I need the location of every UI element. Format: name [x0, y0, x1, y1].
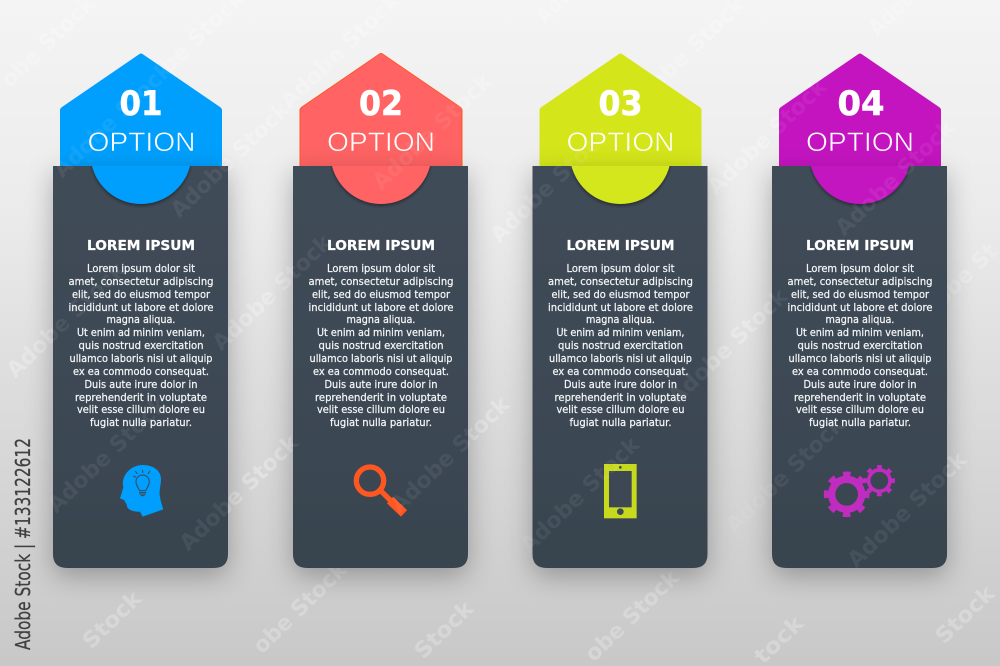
- body text: quis nostrud exercitation: [798, 340, 922, 352]
- body text: ex ea commodo consequat.: [552, 366, 688, 378]
- body text: incididunt ut labore et dolore: [548, 302, 693, 314]
- body text: [548, 263, 693, 429]
- body text: ex ea commodo consequat.: [792, 366, 928, 378]
- icon: gears: [827, 467, 893, 514]
- watermarks on background: Stock: [410, 595, 480, 664]
- tab: lime pentagon: [540, 54, 702, 170]
- body text: Duis aute irure dolor in: [564, 379, 677, 391]
- option label: OPTION: [566, 127, 674, 157]
- tab: coral pentagon: [300, 54, 462, 170]
- side credit text: Adobe Stock | #133122612: [11, 438, 35, 650]
- body text: Ut enim ad minim veniam,: [317, 327, 445, 339]
- watermarks over panels: [2, 57, 973, 573]
- body text: ullamco laboris nisi ut aliquip: [70, 353, 213, 365]
- body text: incididunt ut labore et dolore: [68, 302, 214, 314]
- option label: OPTION: [88, 127, 196, 157]
- watermarks over panels: Adobe Stock: [843, 447, 973, 573]
- tab: purple pentagon: [779, 54, 941, 170]
- watermarks on background: Adobe Stock: [386, 392, 516, 518]
- watermarks over panels: Adobe Stock: [703, 74, 833, 200]
- watermarks on background: Stock: [78, 585, 148, 654]
- panel: option 01: [53, 54, 228, 568]
- body text: incididunt ut labore et dolore: [308, 302, 454, 314]
- body text: elit, sed do eiusmod tempor: [312, 289, 451, 301]
- watermarks over panels: Adobe Stock: [831, 115, 961, 241]
- body text: Ut enim ad minim veniam,: [796, 327, 924, 339]
- body text: Lorem ipsum dolor sit: [327, 263, 435, 275]
- watermarks on background: Stock: [931, 580, 1000, 649]
- watermarks over panels: Adobe Stock: [49, 57, 179, 183]
- body text: magna aliqua.: [586, 314, 655, 326]
- number: 03: [598, 84, 642, 124]
- watermarks on background: Adobe Stock: [831, 115, 961, 241]
- watermarks on background: Adobe Stock: [208, 230, 338, 356]
- tab: circular overlap: [92, 160, 190, 204]
- body text: Duis aute irure dolor in: [324, 379, 438, 391]
- watermarks over panels: Adobe Stock: [166, 97, 296, 223]
- watermarks over panels: Adobe Stock: [175, 430, 305, 556]
- icon: smartphone: [604, 464, 637, 518]
- heading: LOREM IPSUM: [87, 238, 195, 254]
- tab: blue pentagon: [60, 54, 222, 170]
- body text: reprehenderit in voluptate: [315, 392, 447, 404]
- card body: [772, 166, 947, 568]
- number: 01: [120, 84, 162, 124]
- icon: magnifying glass: [356, 467, 404, 513]
- card body: [293, 166, 468, 568]
- body text: fugiat nulla pariatur.: [330, 417, 432, 429]
- body text: quis nostrud exercitation: [78, 340, 204, 352]
- tab: circular overlap: [332, 160, 430, 204]
- body text: elit, sed do eiusmod tempor: [552, 289, 690, 301]
- body text: Duis aute irure dolor in: [84, 379, 198, 391]
- panel: option 03: [532, 54, 708, 568]
- watermarks over panels: Adobe Stock: [2, 257, 132, 383]
- body text: Lorem ipsum dolor sit: [87, 263, 195, 275]
- watermarks over panels: Adobe Stock: [43, 392, 173, 518]
- panel: option 02: [293, 54, 468, 568]
- body text: fugiat nulla pariatur.: [90, 417, 192, 429]
- watermarks on background: Adobe Stock: [843, 447, 973, 573]
- body text: ullamco laboris nisi ut aliquip: [788, 353, 932, 365]
- watermarks on background: obe Stock: [581, 565, 685, 666]
- body text: reprehenderit in voluptate: [75, 392, 207, 404]
- body text: Lorem ipsum dolor sit: [566, 263, 674, 275]
- option label: OPTION: [327, 127, 435, 157]
- heading: LOREM IPSUM: [566, 238, 674, 254]
- body text: reprehenderit in voluptate: [794, 392, 926, 404]
- body text: quis nostrud exercitation: [318, 340, 444, 352]
- watermarks on background: Adobe Stock: [703, 74, 833, 200]
- panel: option 04: [772, 54, 947, 568]
- body text: magna aliqua.: [826, 314, 894, 326]
- body text: fugiat nulla pariatur.: [570, 417, 672, 429]
- body text: fugiat nulla pariatur.: [809, 417, 911, 429]
- watermarks on background: Adobe Stock: [166, 97, 296, 223]
- watermarks on background: Adobe Stock: [664, 284, 794, 410]
- watermarks over panels: Adobe Stock: [486, 122, 616, 248]
- body text: [68, 263, 214, 429]
- watermarks over panels: Adobe Stock: [664, 284, 794, 410]
- card body: [53, 166, 228, 568]
- body text: magna aliqua.: [346, 314, 416, 326]
- watermarks on background: Adobe Stock: [486, 122, 616, 248]
- body text: velit esse cillum dolore eu: [77, 404, 205, 416]
- watermarks on background: Adobe Stock: [49, 57, 179, 183]
- body text: ex ea commodo consequat.: [313, 366, 449, 378]
- number: 02: [359, 84, 403, 124]
- body text: amet, consectetur adipiscing: [788, 276, 932, 288]
- body text: ullamco laboris nisi ut aliquip: [549, 353, 692, 365]
- body text: magna aliqua.: [106, 314, 176, 326]
- body text: [308, 263, 454, 429]
- body text: elit, sed do eiusmod tempor: [72, 289, 211, 301]
- watermarks over panels: Adobe Stock: [516, 432, 646, 558]
- body text: quis nostrud exercitation: [558, 340, 683, 352]
- body text: Ut enim ad minim veniam,: [77, 327, 205, 339]
- watermarks over panels: Adobe Stock: [208, 230, 338, 356]
- watermarks over panels: Adobe Stock: [721, 412, 851, 538]
- watermarks on background: obe Stock: [249, 557, 353, 659]
- body text: velit esse cillum dolore eu: [556, 404, 684, 416]
- watermarks over panels: Adobe Stock: [368, 69, 498, 195]
- watermarks on background: Adobe Stock: [175, 430, 305, 556]
- body text: reprehenderit in voluptate: [554, 392, 686, 404]
- body text: Lorem ipsum dolor sit: [806, 263, 914, 275]
- option label: OPTION: [806, 127, 914, 157]
- body text: amet, consectetur adipiscing: [68, 276, 214, 288]
- body text: amet, consectetur adipiscing: [548, 276, 693, 288]
- watermarks over panels: Adobe Stock: [386, 392, 516, 518]
- icon: head with light bulb: [120, 465, 163, 517]
- heading: LOREM IPSUM: [327, 238, 435, 254]
- body text: velit esse cillum dolore eu: [796, 404, 924, 416]
- body text: Duis aute irure dolor in: [804, 379, 916, 391]
- number: 04: [838, 84, 884, 124]
- tab: circular overlap: [572, 160, 670, 204]
- body text: ullamco laboris nisi ut aliquip: [310, 353, 453, 365]
- body text: incididunt ut labore et dolore: [788, 302, 932, 314]
- body text: [788, 263, 932, 429]
- watermarks on background: Adobe Stock: [2, 257, 132, 383]
- body text: velit esse cillum dolore eu: [317, 404, 445, 416]
- watermarks on background: Adobe Stock: [368, 69, 498, 195]
- body text: elit, sed do eiusmod tempor: [791, 289, 930, 301]
- card body: [532, 166, 708, 568]
- body text: Ut enim ad minim veniam,: [556, 327, 684, 339]
- tab: circular overlap: [811, 160, 909, 204]
- heading: LOREM IPSUM: [806, 238, 914, 254]
- body text: amet, consectetur adipiscing: [308, 276, 454, 288]
- body text: ex ea commodo consequat.: [73, 366, 209, 378]
